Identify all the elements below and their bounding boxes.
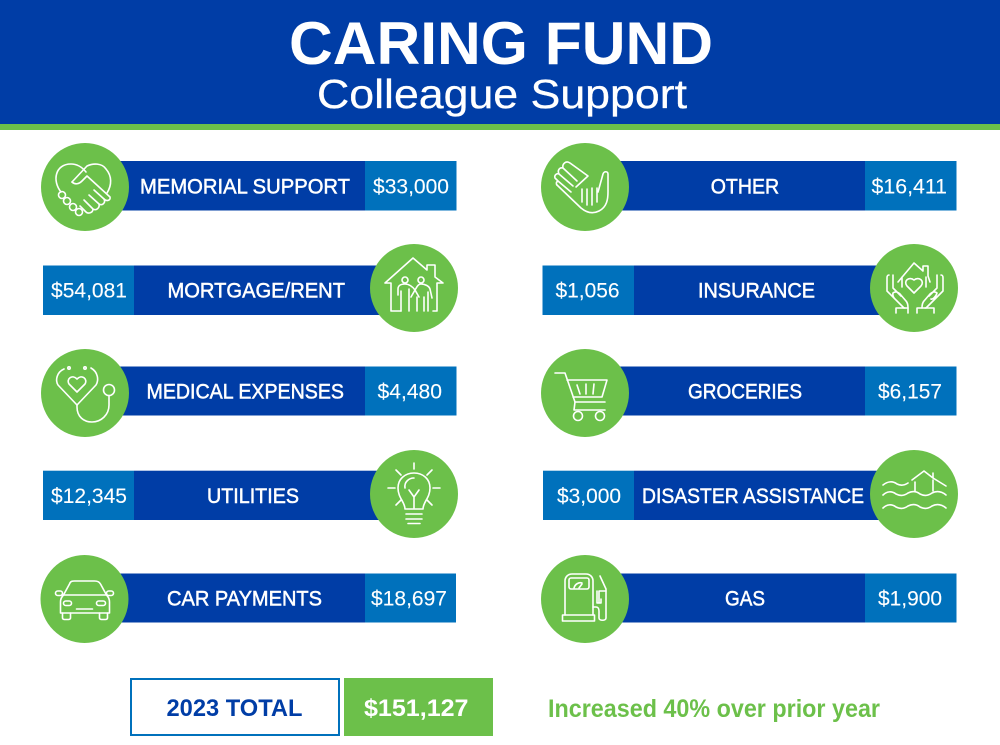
row: groceries	[541, 349, 956, 437]
row: memorial support: MEMORIAL SUPPORT	[140, 176, 350, 199]
total amount	[344, 678, 493, 736]
row: other: OTHER	[711, 176, 779, 199]
row: disaster assistance	[543, 450, 958, 538]
icon: gas pump	[562, 574, 606, 621]
icon: car	[56, 581, 114, 620]
row: car payments	[40, 555, 456, 643]
row: mortgage/rent: MORTGAGE/RENT	[168, 280, 345, 303]
row: insurance	[542, 244, 958, 332]
row: mortgage/rent	[43, 244, 458, 332]
row: disaster assistance: DISASTER ASSISTANCE	[642, 485, 864, 508]
icon: flooded house	[883, 471, 946, 508]
row: other	[541, 143, 956, 231]
row: insurance: INSURANCE	[698, 280, 815, 303]
row: insurance: $1,056	[556, 280, 620, 303]
row: car payments: $18,697	[371, 588, 447, 611]
icon: helping hand	[555, 162, 608, 213]
row: groceries: GROCERIES	[688, 381, 802, 404]
row: memorial support: $33,000	[373, 176, 449, 199]
total amount: $151,127	[364, 695, 468, 722]
row: gas: $1,900	[878, 588, 942, 611]
row: medical expenses: MEDICAL EXPENSES	[146, 381, 344, 404]
icon: shopping cart	[555, 373, 607, 420]
row: utilities: UTILITIES	[207, 485, 299, 508]
icon: hands holding house	[887, 263, 943, 313]
row: medical expenses: $4,480	[378, 381, 442, 404]
title: CARING FUND	[289, 10, 713, 77]
row: disaster assistance: $3,000	[557, 485, 621, 508]
callout: year-over-year increase: Increased 40% over prior year	[548, 695, 880, 723]
row: utilities: $12,345	[51, 485, 127, 508]
row: utilities	[43, 450, 458, 538]
row: memorial support	[41, 143, 456, 231]
row: groceries: $6,157	[878, 381, 942, 404]
icon: family house	[385, 258, 443, 311]
total label	[131, 679, 339, 735]
subtitle: Colleague Support	[317, 71, 688, 117]
icon: light bulb	[388, 463, 440, 524]
total label: 2023 TOTAL	[166, 695, 302, 722]
row: gas	[541, 555, 956, 643]
row: mortgage/rent: $54,081	[51, 280, 127, 303]
row: gas: GAS	[725, 588, 765, 611]
row: medical expenses	[41, 349, 456, 437]
icon: stethoscope heart	[57, 367, 114, 422]
icon: handshake heart	[56, 164, 111, 216]
header banner	[0, 0, 1000, 130]
row: car payments: CAR PAYMENTS	[167, 588, 322, 611]
row: other: $16,411	[872, 176, 947, 199]
